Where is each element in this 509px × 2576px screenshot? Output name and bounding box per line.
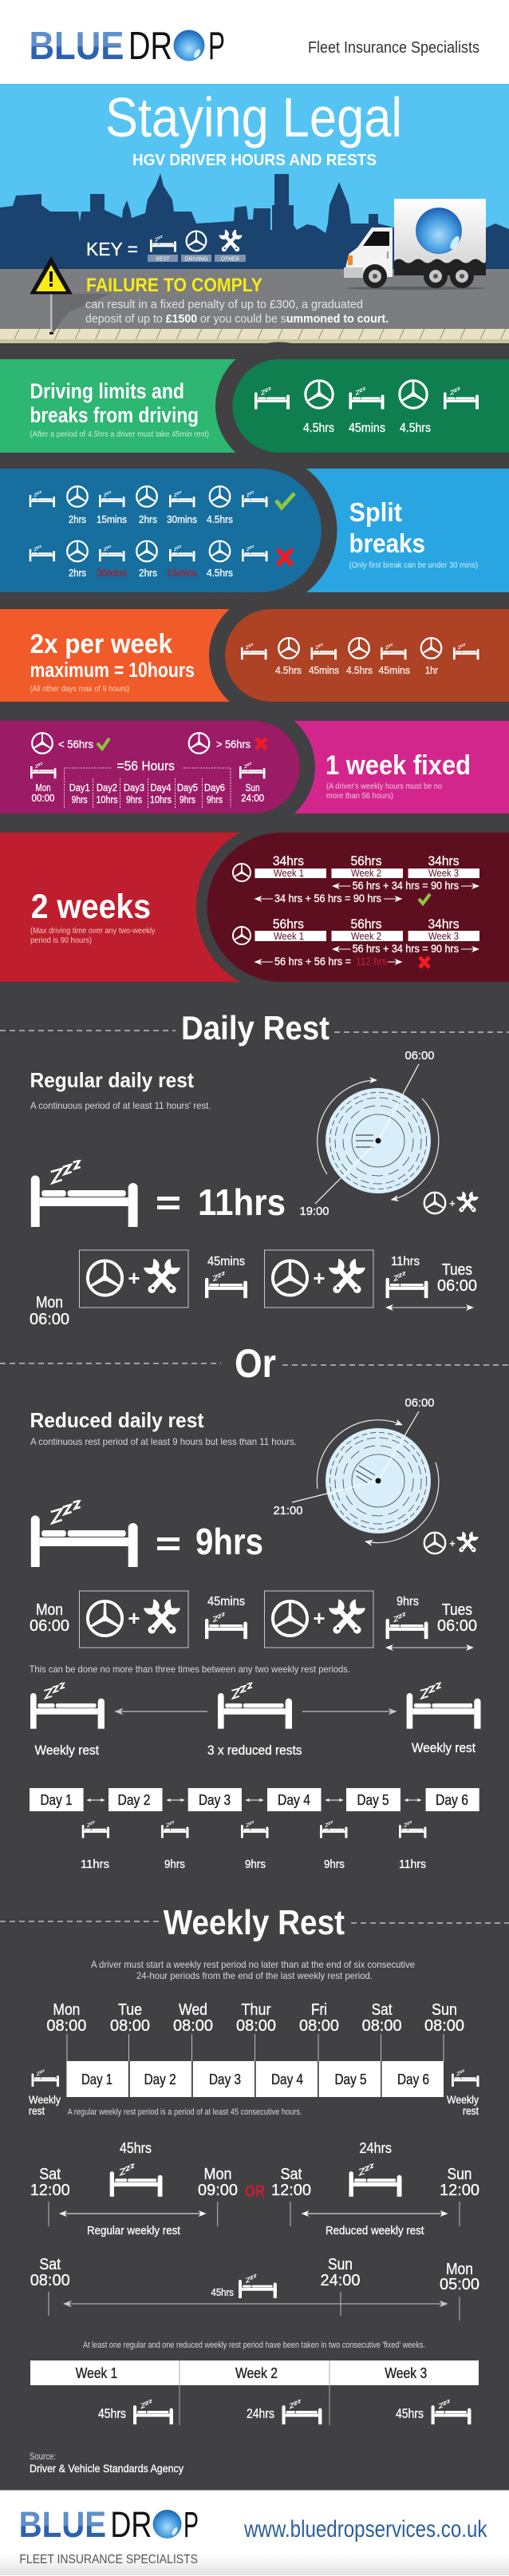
- heading: 2x per week: [30, 629, 172, 659]
- heading: or: Or: [235, 1341, 276, 1386]
- week timeline: Mon: [35, 782, 51, 793]
- regular weekly rest: 45hrs: [120, 2140, 152, 2156]
- timeline: 45mins: [207, 1255, 245, 1268]
- timeline: +: [128, 1266, 140, 1290]
- icons and timings: 4.5hrs: [400, 421, 431, 435]
- heading: Split: [349, 497, 402, 527]
- week timeline: 00:00: [32, 792, 54, 804]
- regular weekly rest: 12:00: [30, 2182, 70, 2199]
- timeline: 06:00: [437, 1617, 477, 1635]
- week timeline: Day6: [204, 782, 225, 793]
- invalid example: 56 hrs + 56 hrs =: [274, 956, 351, 967]
- footer tagline: FLEET INSURANCE SPECIALISTS: [19, 2553, 198, 2566]
- day sequence: 9hrs: [164, 1858, 185, 1871]
- week timeline: 10hrs: [96, 793, 118, 805]
- clock diagram: [300, 1049, 479, 1218]
- callout: failure to comply: deposit of up to £1500 or you could be summoned to court.: [85, 312, 389, 326]
- incorrect sequence: [30, 541, 292, 579]
- logo: BLUE: [29, 24, 124, 68]
- week timeline: Day2: [97, 782, 117, 793]
- weekly schedule: 08:00: [362, 2017, 402, 2035]
- heading: [30, 629, 195, 694]
- icon: rest: REST: [156, 257, 170, 262]
- bed equals 11hrs: [31, 1161, 286, 1227]
- reduced weekly rest: 12:00: [271, 2182, 311, 2199]
- text block: weekly rest intro: [91, 1959, 415, 1981]
- reduced weekly rest: 12:00: [440, 2182, 479, 2199]
- valid example: 34hrs: [273, 853, 304, 869]
- clock diagram: +: [449, 1197, 456, 1209]
- source: Source:: [30, 2451, 56, 2462]
- three week table: Week 1: [76, 2365, 117, 2381]
- week timeline: 9hrs: [72, 793, 88, 805]
- three week table: 45hrs: [98, 2406, 126, 2421]
- incorrect sequence: 4.5hrs: [207, 567, 233, 579]
- panel: 2 weeks: [0, 822, 509, 993]
- three week table: 24hrs: [247, 2406, 274, 2421]
- heading: 2 weeks: [31, 888, 151, 926]
- reduced weekly rest: 24hrs: [359, 2140, 392, 2156]
- timeline: +: [128, 1606, 140, 1630]
- icons and timings: [241, 638, 479, 676]
- weekend rest timeline: 05:00: [440, 2276, 479, 2293]
- correct sequence: 4.5hrs: [207, 513, 233, 525]
- regular or reduced weekly rest: [30, 2140, 479, 2238]
- weekend rest timeline: Mon: [446, 2261, 473, 2278]
- valid example: Week 3: [428, 867, 459, 879]
- invalid example: Week 1: [274, 930, 304, 942]
- logo: DR: [128, 24, 172, 68]
- heading: breaks from driving: [30, 403, 199, 427]
- weekly schedule: Sun: [432, 2001, 457, 2019]
- timeline: [30, 1591, 477, 1648]
- heading: (Max driving time over any two-weekly: [30, 926, 156, 936]
- week timeline: 9hrs: [180, 793, 195, 805]
- icon: weekly rest left: [29, 2070, 61, 2117]
- note: consecutive weeks: At least one regular and one reduced weekly rest period have been taken in two consecutive 'fixed' weeks.: [83, 2341, 425, 2350]
- timeline: Tues: [442, 1601, 472, 1619]
- logo: P: [208, 24, 225, 68]
- invalid example: 34hrs: [428, 916, 460, 932]
- source: Driver & Vehicle Standards Agency: [30, 2462, 183, 2475]
- week timeline: Day5: [177, 782, 198, 793]
- incorrect sequence: 2hrs: [69, 567, 86, 579]
- icons and timings: 4.5hrs: [275, 664, 302, 676]
- callout: failure to comply: [85, 275, 389, 326]
- weekend rest timeline: 24:00: [321, 2272, 361, 2289]
- over 56 hours: > 56hrs: [216, 738, 251, 750]
- valid example: 56 hrs + 34 hrs = 90 hrs: [353, 880, 459, 892]
- correct sequence: 15mins: [97, 513, 127, 525]
- timeline: Tues: [442, 1261, 472, 1279]
- regular weekly rest: [30, 2140, 238, 2238]
- clock diagram: 19:00: [300, 1205, 329, 1218]
- heading: daily rest: Daily Rest: [181, 1009, 329, 1047]
- icon: weekly rest right: Weekly: [447, 2093, 479, 2106]
- correct sequence: 30mins: [167, 513, 197, 525]
- valid example: 34hrs: [428, 853, 460, 869]
- week timeline: 9hrs: [207, 793, 223, 805]
- icon: weekly rest left: rest: [29, 2104, 45, 2117]
- timeline: 06:00: [30, 1617, 69, 1635]
- timeline: Mon: [36, 1601, 63, 1619]
- footer: [0, 2490, 509, 2576]
- timeline: 9hrs: [397, 1595, 419, 1609]
- day sequence: 9hrs: [324, 1858, 345, 1871]
- under 56 hours: < 56hrs: [58, 738, 93, 750]
- timeline: [30, 1250, 477, 1328]
- logo: BLUE: [19, 2505, 106, 2546]
- weekly schedule: Day 6: [397, 2071, 429, 2087]
- heading: breaks: [349, 528, 425, 558]
- timeline: 11hrs: [391, 1255, 420, 1268]
- timeline: +: [313, 1266, 326, 1290]
- three week table: Week 2: [235, 2365, 278, 2381]
- over 56 hours: [189, 733, 266, 754]
- logo: P: [183, 2504, 199, 2545]
- heading: [30, 1068, 211, 1111]
- header: [0, 0, 509, 84]
- bed equals 9hrs: [31, 1501, 263, 1567]
- heading: 1 week fixed: [326, 750, 471, 781]
- title: Staying Legal: [105, 86, 402, 148]
- heading: Reduced daily rest: [30, 1408, 204, 1432]
- panel: 2x per week: [0, 593, 509, 718]
- heading: [30, 888, 156, 945]
- week timeline: Sun: [246, 782, 260, 793]
- icon: driving: DRIVING: [185, 257, 207, 262]
- week timeline: 10hrs: [150, 793, 172, 805]
- clock diagram: 21:00: [273, 1504, 303, 1518]
- road: [0, 269, 509, 329]
- week timeline: =56 Hours: [116, 758, 175, 774]
- clock diagram: 06:00: [405, 1049, 434, 1062]
- timeline: Mon: [36, 1294, 63, 1312]
- day sequence: Day 6: [436, 1792, 468, 1808]
- bed equals 9hrs: 9hrs: [195, 1521, 263, 1562]
- or: OR: [245, 2182, 265, 2201]
- bed equals 11hrs: 11hrs: [198, 1181, 286, 1223]
- day sequence: Day 2: [118, 1792, 150, 1808]
- hero panel: [0, 84, 509, 343]
- heading: weekly rest: Weekly Rest: [164, 1903, 345, 1942]
- correct sequence: 2hrs: [139, 513, 157, 525]
- three week table: 45hrs: [396, 2406, 424, 2421]
- week timeline: Day3: [124, 782, 144, 793]
- icons and timings: 4.5hrs: [303, 421, 334, 435]
- timeline: 45mins: [207, 1595, 245, 1609]
- heading: [349, 497, 478, 570]
- valid example: [233, 853, 479, 904]
- weekly schedule: 08:00: [299, 2017, 339, 2035]
- heading: Regular daily rest: [30, 1068, 194, 1092]
- day sequence: 11hrs: [81, 1858, 109, 1871]
- icon: rest: [148, 235, 178, 262]
- week timeline: [30, 758, 265, 808]
- skyline: [0, 173, 509, 271]
- icons and timings: 45mins: [378, 664, 410, 676]
- pavement: [0, 329, 509, 343]
- weekly schedule: 08:00: [46, 2017, 86, 2035]
- note: A regular weekly rest period is a period of at least 45 consecutive hours.: [68, 2107, 302, 2117]
- under 56 hours: [32, 733, 109, 754]
- regular weekly rest: 09:00: [198, 2182, 238, 2199]
- weekend rest timeline: Sat: [39, 2256, 61, 2273]
- tagline: Fleet Insurance Specialists: [308, 39, 479, 57]
- icon: weekly rest left: Weekly: [29, 2093, 61, 2106]
- correct sequence: [30, 486, 294, 525]
- reduced rests between weekly rests: [30, 1683, 481, 1758]
- weekly schedule: Day 5: [335, 2071, 367, 2087]
- day sequence: 9hrs: [245, 1858, 266, 1871]
- key: KEY =: [86, 239, 138, 259]
- icons and timings: 4.5hrs: [346, 664, 373, 676]
- heading: (Only first break can be under 30 mins): [349, 561, 478, 570]
- logo: [19, 2504, 199, 2546]
- day sequence: Day 4: [278, 1792, 310, 1808]
- weekly schedule: 08:00: [424, 2017, 464, 2035]
- logo: O: [154, 2505, 180, 2545]
- three week table: Week 3: [385, 2365, 427, 2381]
- icon: warning sign: [30, 257, 110, 334]
- heading: A continuous period of at least 11 hours' rest.: [30, 1100, 211, 1111]
- panel: split breaks: [0, 453, 509, 608]
- reduced weekly rest: Sun: [447, 2166, 472, 2183]
- valid example: 56hrs: [351, 853, 381, 869]
- day sequence: [30, 1788, 479, 1871]
- regular weekly rest: Sat: [39, 2166, 61, 2183]
- invalid example: 112 hrs: [356, 956, 387, 967]
- invalid example: Week 2: [351, 930, 381, 942]
- note: This can be done no more than three times between any two weekly rest periods.: [30, 1664, 350, 1675]
- regular weekly rest: Mon: [204, 2166, 231, 2183]
- day sequence: 11hrs: [399, 1858, 426, 1871]
- reduced weekly rest: Sat: [281, 2166, 302, 2183]
- invalid example: 56 hrs + 34 hrs = 90 hrs: [353, 943, 459, 955]
- logo: O: [176, 24, 203, 68]
- heading: (All other days max of 9 hours): [30, 685, 129, 694]
- week timeline: Day4: [150, 782, 171, 793]
- valid example: Week 1: [274, 867, 304, 879]
- day sequence: Day 3: [199, 1792, 231, 1808]
- reduced rests between weekly rests: Weekly rest: [35, 1743, 99, 1758]
- three week table: [30, 2360, 479, 2425]
- heading: A continuous rest period of at least 9 hours but less than 11 hours.: [30, 1436, 297, 1447]
- icon: other: [215, 229, 246, 262]
- logo: [29, 24, 225, 68]
- heading: (After a period of 4.5hrs a driver must take 45min rest): [30, 430, 209, 439]
- invalid example: [233, 916, 479, 967]
- incorrect sequence: 2hrs: [139, 567, 157, 579]
- week timeline: 9hrs: [126, 793, 142, 805]
- icons and timings: 45mins: [349, 421, 385, 435]
- weekly schedule: Day 2: [144, 2071, 176, 2087]
- icon: driving: [181, 231, 211, 262]
- weekly schedule: 08:00: [110, 2017, 150, 2035]
- invalid example: 56hrs: [351, 916, 381, 932]
- heading: (A driver's weekly hours must be no: [326, 782, 442, 791]
- weekly schedule: [29, 2001, 479, 2117]
- icons and timings: 45mins: [309, 664, 339, 676]
- weekly schedule: Mon: [53, 2001, 80, 2019]
- weekend rest timeline: Sun: [328, 2256, 353, 2273]
- text block: weekly rest intro: 24-hour periods from the end of the last weekly rest period.: [136, 1970, 373, 1981]
- section: reduced daily rest: [30, 1396, 481, 1871]
- subtitle: HGV DRIVER HOURS AND RESTS: [132, 152, 377, 169]
- icon: truck: [344, 199, 486, 290]
- invalid example: 56hrs: [273, 916, 304, 932]
- panel: driving limits: [0, 342, 509, 469]
- reduced weekly rest: Reduced weekly rest: [326, 2224, 424, 2238]
- incorrect sequence: 30mins: [97, 567, 127, 579]
- heading: [30, 379, 209, 439]
- timeline: +: [313, 1606, 326, 1630]
- key: [86, 229, 246, 262]
- heading: maximum = 10hours: [30, 658, 195, 682]
- weekly schedule: 08:00: [173, 2017, 213, 2035]
- weekly schedule: Tue: [118, 2001, 142, 2019]
- heading: [326, 750, 471, 801]
- logo: DR: [110, 2504, 152, 2545]
- weekly schedule: 08:00: [236, 2017, 276, 2035]
- reduced rests between weekly rests: 3 x reduced rests: [207, 1743, 302, 1758]
- week timeline: Day1: [69, 782, 90, 793]
- callout: failure to comply: can result in a fixed penalty of up to £300, a graduated: [85, 298, 363, 311]
- weekly schedule: Fri: [311, 2001, 327, 2019]
- clock diagram: +: [449, 1537, 456, 1549]
- icons and timings: [254, 381, 479, 435]
- weekly schedule: Day 1: [81, 2071, 112, 2087]
- clock diagram: 06:00: [405, 1396, 434, 1410]
- heading: more than 56 hours): [326, 791, 393, 801]
- timeline: 06:00: [437, 1277, 477, 1295]
- heading: period is 90 hours): [30, 936, 92, 945]
- regular weekly rest: Regular weekly rest: [87, 2224, 181, 2238]
- icon: weekly rest right: [447, 2070, 479, 2117]
- weekly schedule: Thur: [241, 2001, 271, 2019]
- clock diagram: [273, 1396, 479, 1555]
- valid example: 34 hrs + 56 hrs = 90 hrs: [274, 892, 381, 904]
- weekly schedule: Wed: [179, 2001, 207, 2019]
- invalid example: Week 3: [428, 930, 459, 942]
- weekend rest timeline: [30, 2256, 479, 2321]
- day sequence: Day 1: [40, 1792, 72, 1808]
- valid example: Week 2: [351, 867, 381, 879]
- incorrect sequence: 15mins: [167, 567, 197, 579]
- weekly schedule: Day 4: [271, 2071, 303, 2087]
- heading: Driving limits and: [30, 379, 184, 403]
- weekend rest timeline: 08:00: [30, 2272, 70, 2289]
- icon: other: OTHER: [221, 257, 239, 262]
- icon: weekly rest right: rest: [463, 2104, 479, 2117]
- reduced rests between weekly rests: Weekly rest: [412, 1740, 475, 1755]
- weekly schedule: Sat: [372, 2001, 393, 2019]
- heading: [30, 1408, 297, 1447]
- callout: failure to comply: FAILURE TO COMPLY: [86, 275, 262, 296]
- timeline: 06:00: [30, 1311, 69, 1328]
- weekend rest timeline: 45hrs: [211, 2286, 234, 2298]
- weekly schedule: Day 3: [209, 2071, 241, 2087]
- source: [30, 2451, 183, 2475]
- section: regular daily rest: [30, 1049, 479, 1328]
- day sequence: Day 5: [357, 1792, 389, 1808]
- week timeline: 24:00: [241, 792, 264, 804]
- correct sequence: 2hrs: [69, 513, 86, 525]
- icons and timings: 1hr: [425, 664, 439, 676]
- panel: 1 week fixed: [0, 706, 509, 829]
- reduced weekly rest: [271, 2140, 479, 2238]
- text block: weekly rest intro: A driver must start a weekly rest period no later than at the end of six consecutive: [91, 1959, 415, 1970]
